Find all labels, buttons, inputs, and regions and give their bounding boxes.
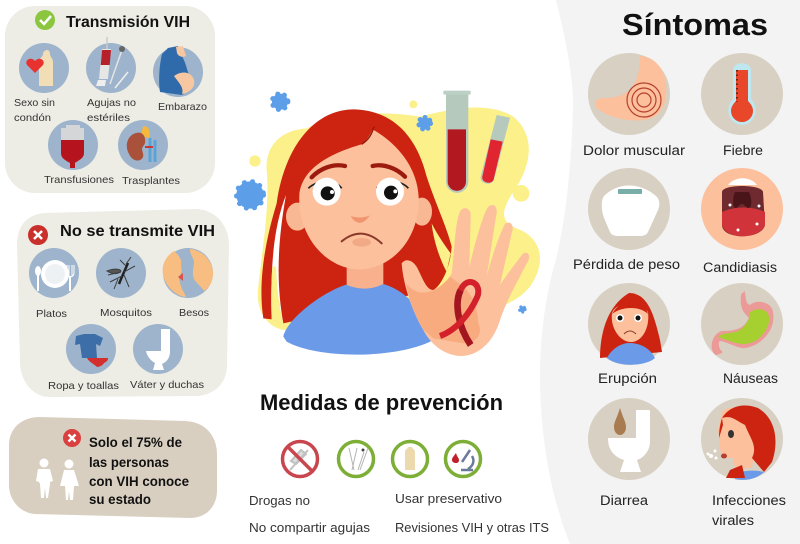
prevention icons (282, 442, 480, 476)
label: condón (14, 112, 51, 124)
icon: no drugs (282, 442, 318, 476)
panel background (9, 417, 217, 518)
label: Ropa y toallas (48, 380, 119, 392)
label: Besos (179, 307, 209, 319)
icon: condom and heart (19, 43, 69, 93)
label: Candidiasis (703, 260, 777, 275)
tube 1 (443, 91, 471, 193)
heading: medidas de prevención: Medidas de prevención (260, 390, 503, 415)
decorative dots (249, 100, 529, 202)
test tubes (443, 91, 510, 193)
line: Solo el 75% de (89, 435, 182, 450)
ears (286, 198, 432, 231)
symptom: náuseas (701, 283, 783, 386)
panel background (5, 6, 215, 193)
neck (347, 257, 383, 293)
heading: No se transmite VIH (60, 223, 215, 240)
eyebrows (312, 165, 405, 177)
icon: pregnant woman (153, 46, 203, 97)
blue shirt (283, 284, 433, 355)
icon: toilet (133, 324, 183, 374)
label: Erupción (598, 371, 657, 386)
line: las personas (89, 455, 169, 470)
palm and fingers (402, 205, 529, 356)
panel: síntomas background (540, 0, 800, 544)
left eye (308, 178, 342, 206)
hair slit right (432, 223, 451, 272)
parting (362, 127, 374, 144)
symptom: diarrea (588, 398, 670, 508)
ribbon front strand (440, 282, 478, 336)
label: Agujas no (87, 97, 136, 109)
label: Trasplantes (122, 175, 180, 187)
label: Platos (36, 308, 67, 320)
icon: thermometer (701, 53, 783, 135)
icon: open mouth (701, 168, 783, 250)
symptom: erupción (588, 283, 670, 386)
eyes (308, 178, 408, 206)
icon: check (35, 10, 55, 30)
label: Náuseas (723, 371, 778, 386)
ribbon back strand (458, 290, 471, 345)
icon: microscope and blood (446, 442, 480, 476)
line: su estado (89, 492, 151, 507)
red ribbon (440, 282, 478, 345)
icon: condom (392, 442, 428, 476)
icon: two people (36, 458, 79, 500)
label: Revisiones VIH y otras ITS (395, 521, 549, 535)
label: Transfusiones (44, 174, 114, 186)
viruses (236, 94, 525, 312)
label: Dolor muscular (583, 143, 686, 158)
yellow blob (258, 108, 540, 330)
illustration: woman with raised hand (236, 91, 540, 356)
heading: Transmisión VIH (66, 14, 190, 31)
hair slit lower (271, 267, 283, 323)
right eye (376, 178, 408, 206)
panel background (17, 209, 229, 397)
icon: plate and cutlery (29, 248, 79, 298)
face (299, 129, 419, 269)
icon: syringe and needles (86, 37, 136, 93)
icon: mosquito (96, 248, 146, 298)
tube 2 (481, 115, 510, 184)
label: Váter y duchas (130, 379, 204, 391)
icon: blood bag (48, 120, 98, 170)
heading: síntomas: Síntomas (622, 7, 768, 42)
icon: kiss (163, 248, 213, 298)
label: virales (712, 513, 754, 528)
label: Pérdida de peso (573, 257, 680, 272)
lip shadow (352, 238, 371, 247)
icon: scale (588, 168, 670, 250)
icon: red cross (63, 429, 81, 447)
panel: transmisión VIH (5, 6, 215, 193)
symptom: candidiasis (701, 168, 783, 275)
symptom: fiebre (701, 53, 783, 158)
label: estériles (87, 112, 130, 124)
mouth (342, 234, 382, 243)
palm shade (406, 277, 480, 343)
nose (351, 215, 370, 223)
panel: no se transmite VIH (17, 209, 229, 397)
icon: toilet and drop (588, 398, 670, 480)
prevention labels (249, 492, 549, 535)
label: Fiebre (723, 143, 763, 158)
symptom: pérdida de peso (573, 168, 680, 272)
icon: woman with rash (588, 283, 670, 365)
text block (89, 435, 189, 507)
icon: stomach (701, 283, 783, 365)
icon: foot with pain rings (588, 53, 670, 135)
label: Drogas no (249, 494, 310, 508)
icon: clothes (66, 324, 116, 374)
hair back (261, 109, 452, 323)
label: Sexo sin (14, 97, 55, 109)
icon: coughing woman (701, 398, 783, 480)
icon: kidney (118, 120, 168, 170)
label: Embarazo (158, 101, 207, 113)
label: Infecciones (712, 493, 786, 508)
hair slit left (271, 195, 286, 323)
label: Usar preservativo (395, 492, 502, 506)
label: Diarrea (600, 493, 649, 508)
label: Mosquitos (100, 307, 152, 319)
icon: sterile needles (338, 442, 374, 476)
symptom: dolor muscular (583, 53, 686, 158)
hand (402, 205, 529, 356)
line: con VIH conoce (89, 474, 189, 489)
symptom: infecciones virales (701, 398, 786, 528)
icon: red cross (28, 225, 48, 245)
panel: 75% (9, 417, 217, 518)
label: No compartir agujas (249, 521, 370, 535)
